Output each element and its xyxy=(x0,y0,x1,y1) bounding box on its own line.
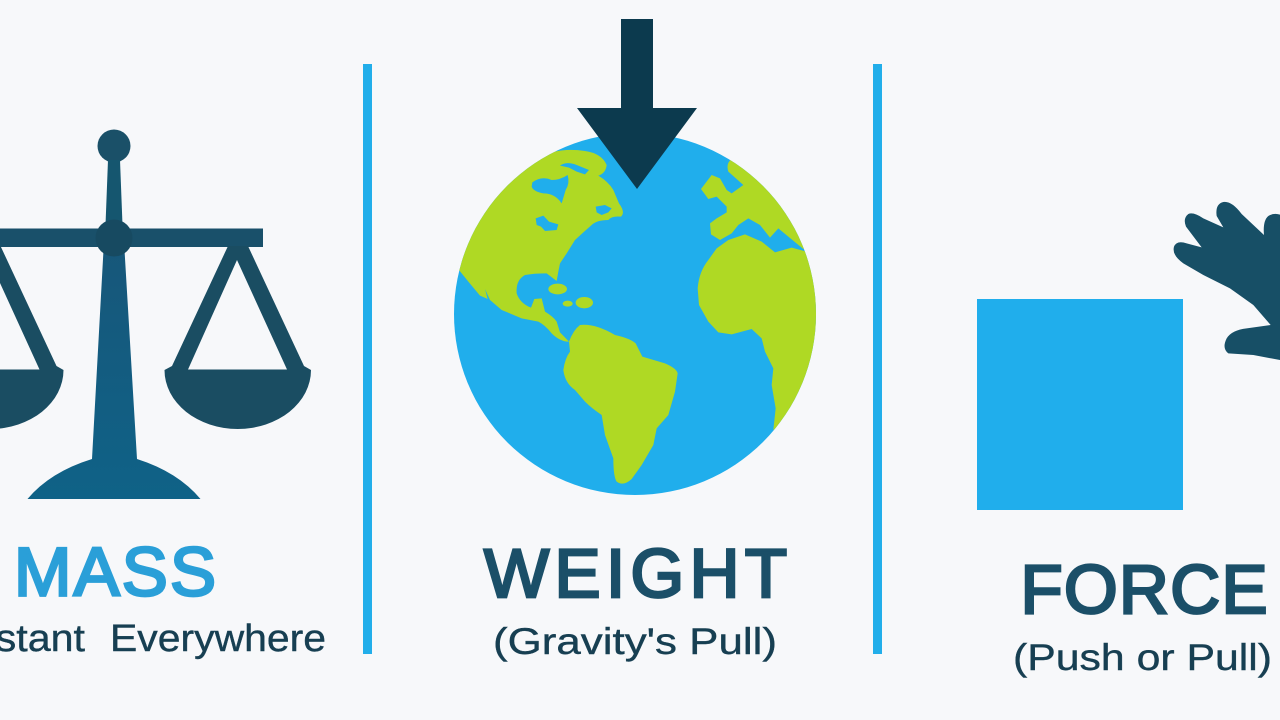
continent: Europe xyxy=(701,160,804,249)
icon: pushing hand xyxy=(1174,202,1280,361)
text: mass subtitle: Everywhere xyxy=(110,618,326,660)
sea: Hudson Bay xyxy=(532,175,568,203)
continent: South America xyxy=(563,325,678,484)
heading: mass: MASS xyxy=(14,534,216,610)
text: weight subtitle: (Gravity's Pull) xyxy=(493,621,777,662)
icon: balance scale xyxy=(0,130,311,499)
text: force subtitle: (Push or Pull) xyxy=(1013,637,1272,678)
heading: force: FORCE xyxy=(1020,551,1268,628)
divider: left xyxy=(363,64,372,654)
sea: Arctic inlet xyxy=(560,163,589,174)
continent: Africa xyxy=(698,234,822,430)
icon: earth globe xyxy=(452,133,822,495)
icon: blue box xyxy=(977,299,1183,510)
sea: Labrador inlet xyxy=(596,205,612,215)
islands: Caribbean xyxy=(548,284,567,294)
icon: down arrow xyxy=(577,19,697,189)
text: mass subtitle xyxy=(0,618,326,660)
heading: weight: WEIGHT xyxy=(484,535,787,612)
continent: North America xyxy=(452,150,623,342)
sea: Great Lakes xyxy=(536,216,558,231)
divider: right xyxy=(873,64,882,654)
